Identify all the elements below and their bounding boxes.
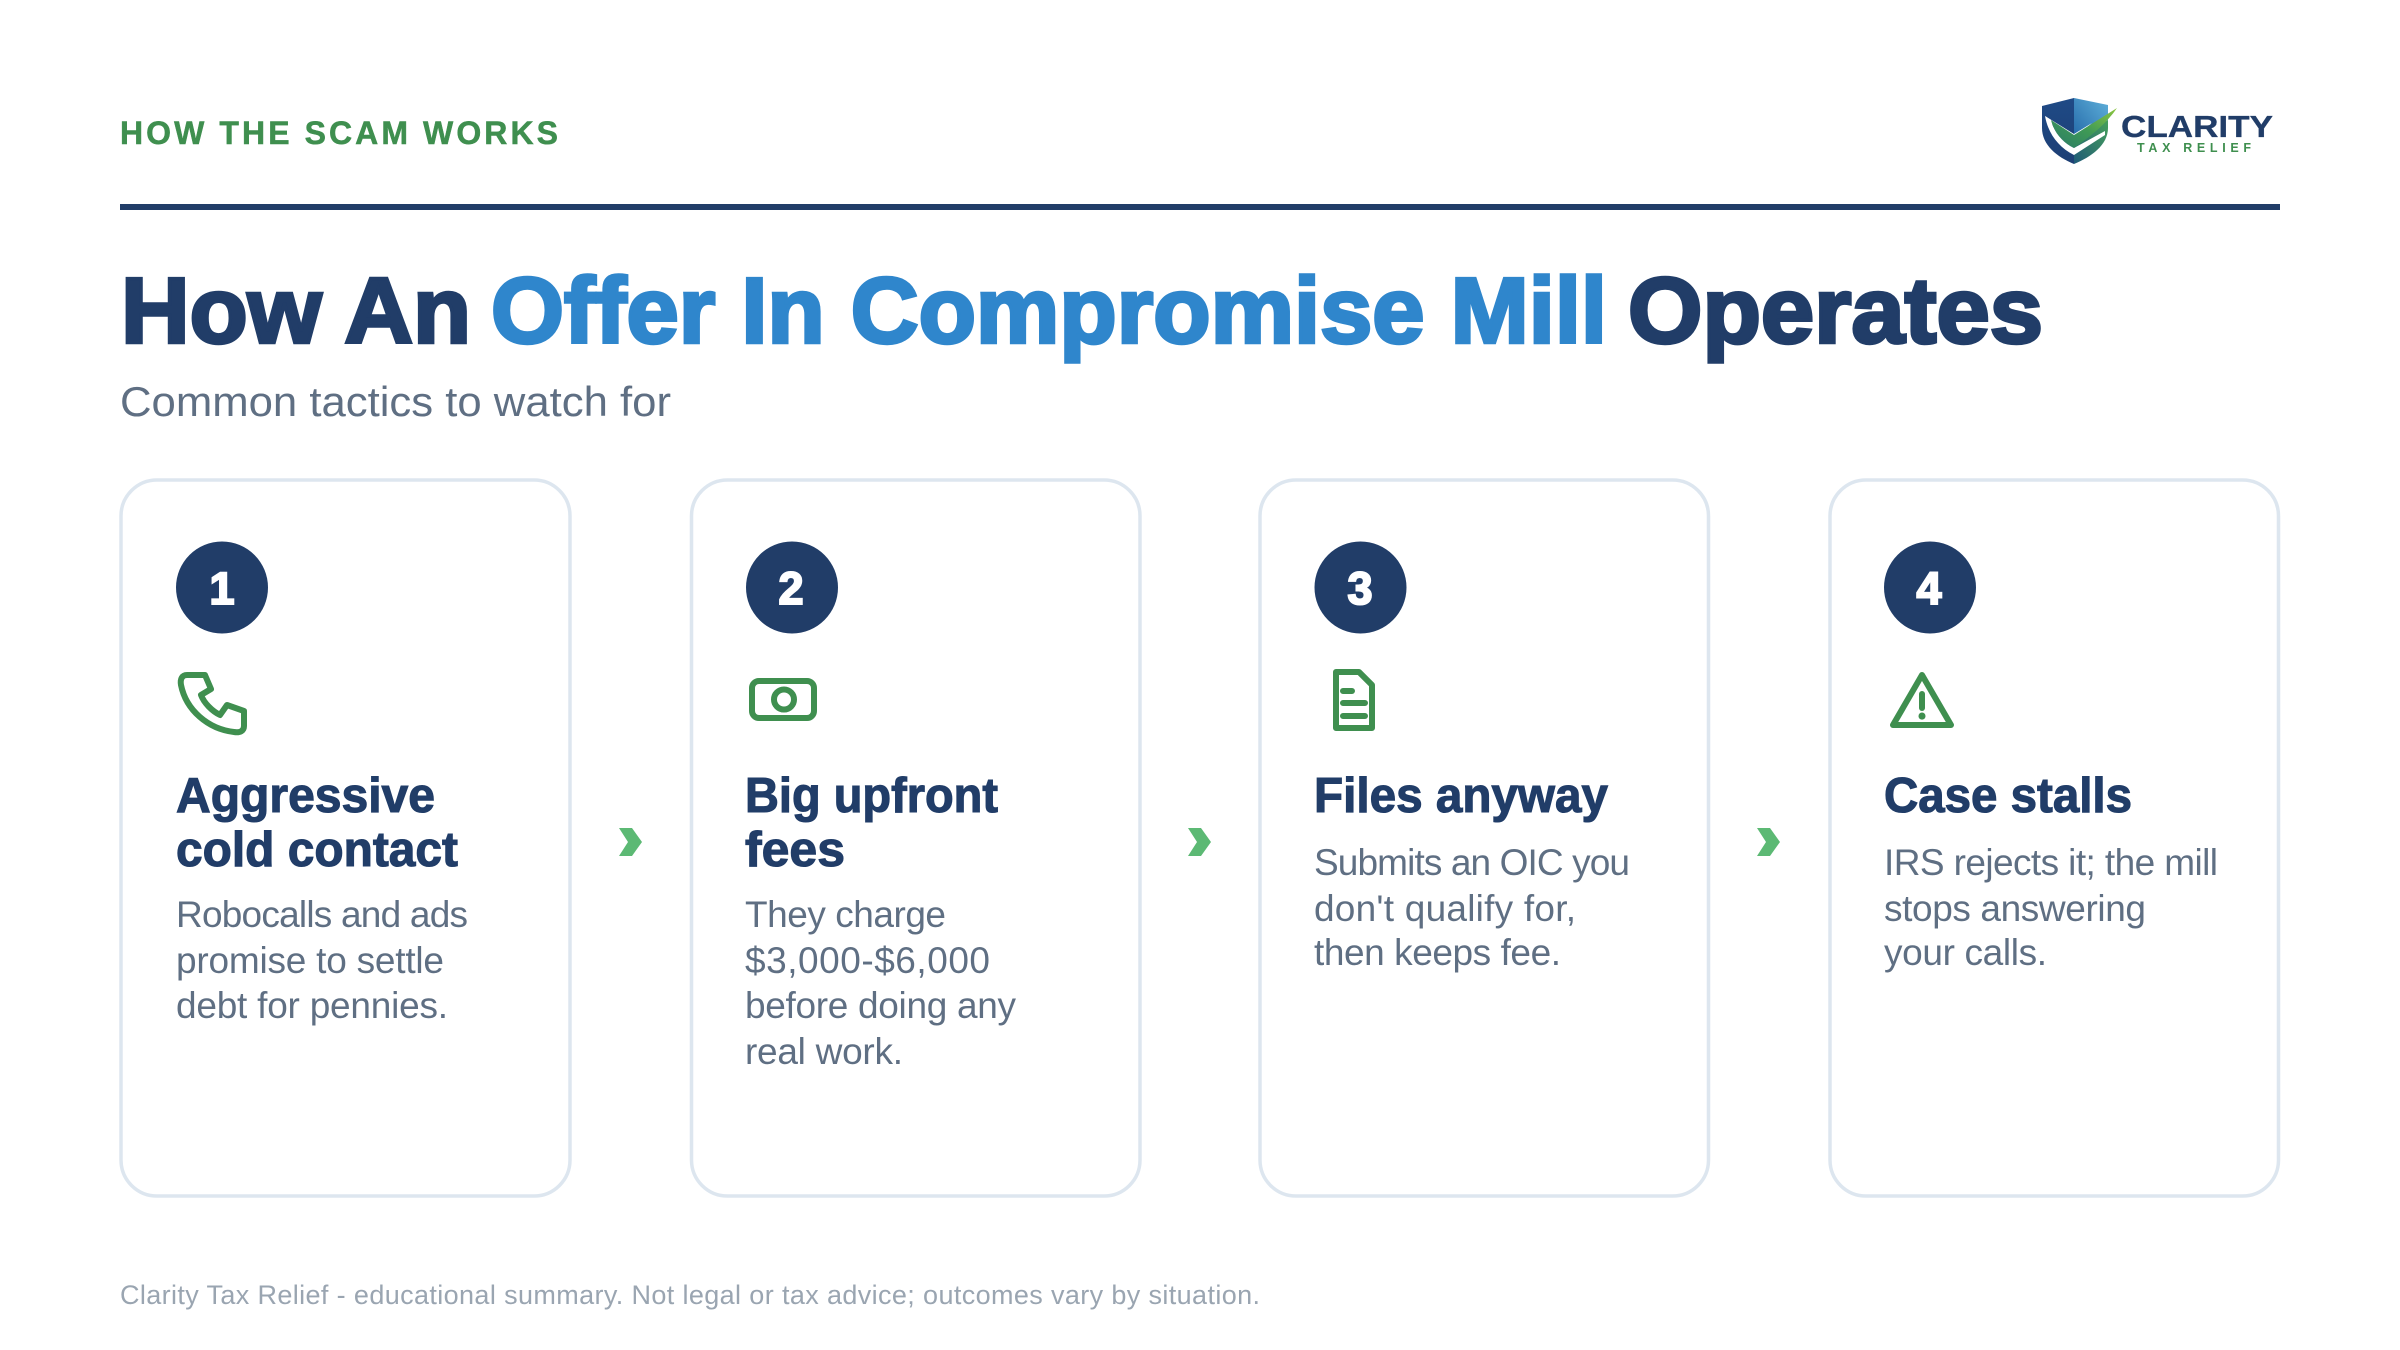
logo: Clarity Tax Relief: [2042, 98, 2273, 164]
step 1 description: Robocalls and ads: [176, 894, 468, 935]
step 3 description: then keeps fee.: [1314, 932, 1561, 973]
step 1 description: promise to settle: [176, 940, 444, 981]
title: Offer In Compromise Mill: [491, 258, 1607, 362]
step 2 description: $3,000-$6,000: [745, 940, 990, 981]
step 1 heading: Aggressive: [176, 769, 435, 823]
step 3 heading: Files anyway: [1314, 769, 1608, 823]
step 3 description: Submits an OIC you: [1314, 842, 1630, 883]
title: Operates: [1628, 258, 2043, 362]
step number 3: 3: [1347, 563, 1373, 614]
step 4 description: [1884, 842, 2218, 973]
arrow 3: [1757, 828, 1780, 856]
step number 4: [1884, 542, 1976, 634]
arrow 2: [1188, 828, 1211, 856]
step number 2: 2: [778, 563, 804, 614]
step number 1: 1: [209, 563, 235, 614]
step number 2: [746, 542, 838, 634]
step 2 description: [745, 894, 1016, 1072]
step 4 heading: Case stalls: [1884, 769, 2132, 823]
step 3 description: [1314, 842, 1630, 973]
panel: step 2 big upfront fees: [692, 480, 1140, 1196]
step 1 heading: [176, 769, 458, 877]
icon: warning triangle: [1893, 675, 1951, 725]
step 2 description: before doing any: [745, 985, 1016, 1026]
header rule: [120, 204, 2280, 210]
step number 3: [1314, 542, 1406, 634]
footer disclaimer: Clarity Tax Relief - educational summary. Not legal or tax advice; outcomes vary by situation.: [120, 1280, 1260, 1310]
step 2 heading: [745, 769, 998, 877]
icon: cash: [752, 681, 814, 718]
step 1 heading: cold contact: [176, 823, 458, 877]
panel: step 3 files anyway: [1260, 480, 1708, 1196]
step number 4: 4: [1916, 563, 1942, 614]
logo wordmark: CLARITY: [2121, 109, 2273, 144]
step 2 heading: fees: [745, 823, 845, 877]
step 4 description: IRS rejects it; the mill: [1884, 842, 2218, 883]
step 3 description: don't qualify for,: [1314, 888, 1576, 929]
step 2 description: They charge: [745, 894, 946, 935]
arrow 1: [619, 828, 642, 856]
step 2 description: real work.: [745, 1031, 903, 1072]
step 4 description: your calls.: [1884, 932, 2047, 973]
icon: phone: [181, 675, 244, 732]
step 4 description: stops answering: [1884, 888, 2146, 929]
icon: document: [1336, 672, 1372, 728]
logo tagline: TAX RELIEF: [2137, 141, 2251, 155]
panel: step 1 aggressive cold contact: [121, 480, 570, 1196]
logo shield: [2042, 98, 2117, 164]
panel: step 4 case stalls: [1830, 480, 2278, 1196]
step number 1: [176, 542, 268, 634]
title: [121, 258, 2043, 362]
step 1 description: [176, 894, 468, 1026]
eyebrow heading: HOW THE SCAM WORKS: [120, 115, 558, 151]
step 1 description: debt for pennies.: [176, 985, 448, 1026]
title: How An: [121, 258, 471, 362]
step 2 heading: Big upfront: [745, 769, 998, 823]
subtitle: Common tactics to watch for: [120, 378, 671, 425]
